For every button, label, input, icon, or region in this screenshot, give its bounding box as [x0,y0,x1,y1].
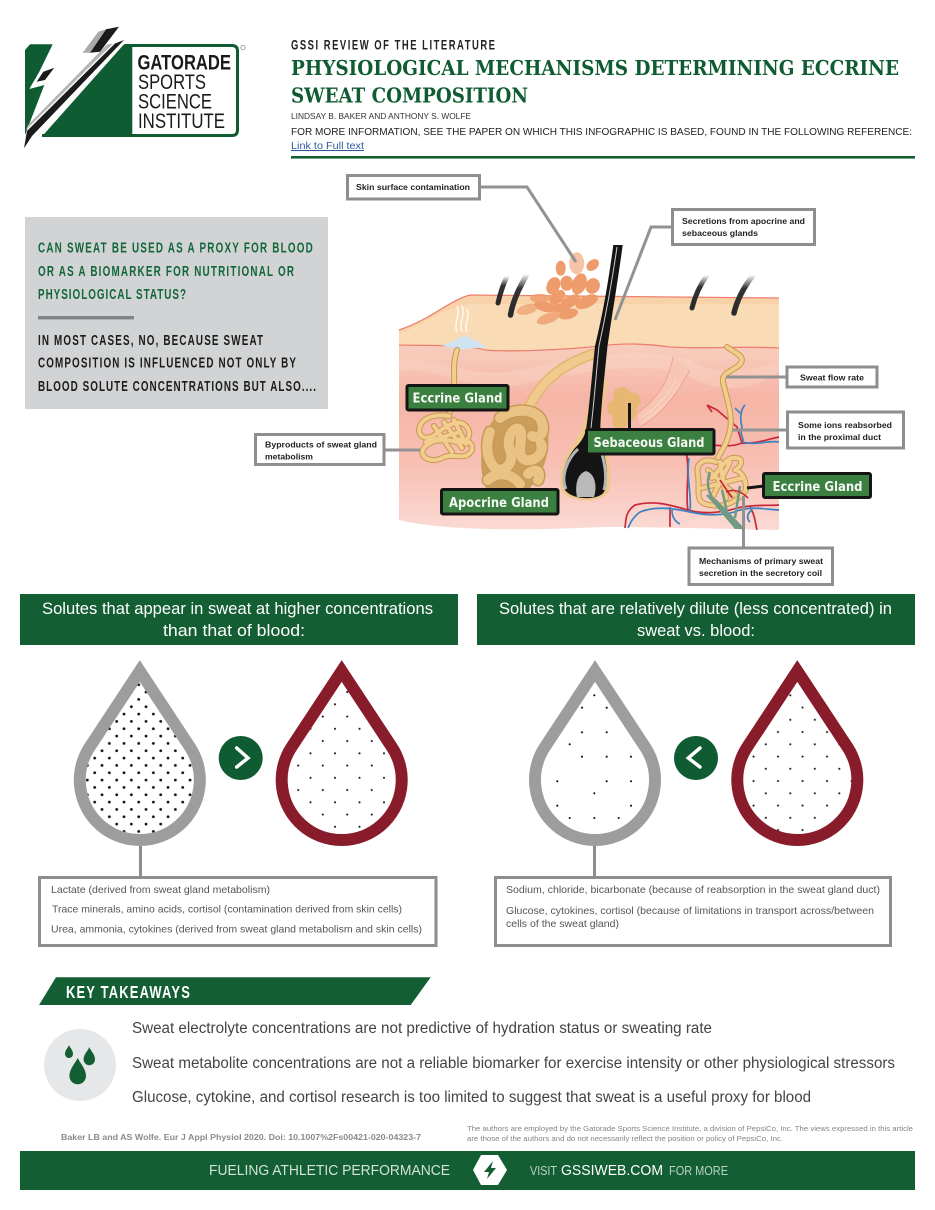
epidermis layer [399,295,779,351]
blood vessels [625,405,779,530]
text box: solutes dilute in sweat: Glucose, cytokines, cortisol (because of limitations in transport across/between [506,905,874,917]
question text: CAN SWEAT BE USED AS A PROXY FOR BLOOD [38,240,313,256]
text box: solutes higher in sweat: Lactate (derived from sweat gland metabolism) [51,884,270,896]
takeaway statements [132,1020,895,1106]
disclaimer: The authors are employed by the Gatorade Sports Science Institute, a division of PepsiCo, Inc. The views expressed in this article [467,1124,913,1133]
footer bar [20,1151,915,1190]
apocrine gland and duct [481,354,593,488]
panel header: solutes at higher concentrations [20,594,458,645]
right eccrine gland duct and coil [697,347,748,529]
arrector muscle [638,357,690,427]
answer text [38,332,316,395]
icon: hexagon bolt [473,1155,507,1185]
skin surface flakes [515,252,602,327]
callout: ions reabsorbed: Some ions reabsorbed [798,420,892,430]
label: eccrine gland right [747,474,870,498]
drop: blood, sparse solutes [272,660,412,850]
panel: key question [25,217,328,409]
logo: Gatorade Sports Science Institute: SPORTS [138,71,206,94]
text box: solutes dilute in sweat [496,846,890,946]
label: eccrine gland left [407,386,508,410]
callout: mechanisms of primary secretion: Mechanisms of primary sweat [699,556,823,566]
callout: ions reabsorbed: in the proximal duct [798,432,881,442]
callout: byproducts: Byproducts of sweat gland [265,440,377,450]
callout: sweat flow rate: Sweat flow rate [800,372,864,382]
takeaway statements: Sweat metabolite concentrations are not a reliable biomarker for exercise intensity or other physiological stressors [132,1055,895,1072]
takeaway statements: Glucose, cytokine, and cortisol research is too limited to suggest that sweat is a useful proxy for blood [132,1089,811,1106]
drop: sweat, dense solutes [70,660,210,850]
header: series label, title, authors, reference: SWEAT COMPOSITION [291,84,528,108]
disclaimer [467,1124,913,1143]
label: apocrine gland [442,490,558,514]
logo: Gatorade Sports Science Institute [24,27,245,148]
label: eccrine gland right: Eccrine Gland [772,479,862,495]
main hair and follicle [560,245,623,500]
icon: sweat drops [44,1029,116,1101]
text box: solutes dilute in sweat: Sodium, chloride, bicarbonate (because of reabsorption in the sweat gland duct) [506,884,880,896]
text box: solutes higher in sweat: Urea, ammonia, cytokines (derived from sweat gland metabolism and skin cells) [51,924,422,936]
logo: Gatorade Sports Science Institute: SCIENCE [138,91,212,114]
panel header: relatively dilute solutes: sweat vs. blood: [637,622,755,640]
callout: skin surface contamination [348,176,576,262]
header: series label, title, authors, reference: Link to Full text [291,140,364,152]
footer bar: FUELING ATHLETIC PERFORMANCE [209,1162,450,1179]
question text [38,240,313,303]
callout: secretions: sebaceous glands [682,228,758,238]
header: series label, title, authors, reference: FOR MORE INFORMATION, SEE THE PAPER ON WHICH THIS INFOGRAPHIC IS BASED, FOUND IN THE FOLLOWING REFERENCE: [291,126,912,138]
takeaway statements: Sweat electrolyte concentrations are not predictive of hydration status or sweating rate [132,1020,712,1037]
drop: blood, more solutes [728,660,868,850]
panel header: relatively dilute solutes: Solutes that are relatively dilute (less concentrated) in [499,600,892,618]
callout: secretions [615,210,814,320]
disclaimer: are those of the authors and do not necessarily reflect the position or policy of PepsiCo, Inc. [467,1134,783,1143]
panel header: solutes at higher concentrations: Solutes that appear in sweat at higher concentrations [42,600,433,618]
answer text: COMPOSITION IS INFLUENCED NOT ONLY BY [38,355,297,371]
small hairs [498,274,753,315]
text box: solutes higher in sweat: Trace minerals, amino acids, cortisol (contamination derived from skin cells) [52,904,402,916]
drop: sweat, dilute solutes [535,671,655,840]
callout: mechanisms of primary secretion: secretion in the secretory coil [699,568,822,578]
label: sebaceous gland: Sebaceous Gland [594,435,704,451]
callout: byproducts: metabolism [265,452,313,462]
header: series label, title, authors, reference [291,38,915,159]
label: sebaceous gland [586,403,714,454]
dermis layer [399,340,779,535]
text box: solutes dilute in sweat: cells of the sweat gland) [506,918,619,930]
left eccrine gland duct and coil [419,350,472,460]
answer text: BLOOD SOLUTE CONCENTRATIONS BUT ALSO.... [38,378,316,395]
skin cross-section illustration [399,245,779,535]
logo: Gatorade Sports Science Institute: GATORADE [138,52,231,74]
text box: solutes higher in sweat [40,846,436,946]
answer text: IN MOST CASES, NO, BECAUSE SWEAT [38,332,263,349]
footer bar: VISIT [530,1164,557,1178]
logo: Gatorade Sports Science Institute: INSTITUTE [138,110,225,133]
footer bar: FOR MORE [669,1164,728,1178]
callout: sweat flow rate [726,367,877,387]
icon: greater than [219,736,263,780]
panel header: relatively dilute solutes [477,594,915,645]
callout: secretions: Secretions from apocrine and [682,216,805,226]
key takeaways banner [39,977,431,1005]
callout: mechanisms of primary secretion [689,496,832,584]
header: series label, title, authors, reference: GSSI REVIEW OF THE LITERATURE [291,38,495,53]
callout: skin surface contamination: Skin surface contamination [356,182,470,192]
icon: less than [674,736,718,780]
label: apocrine gland: Apocrine Gland [449,495,549,511]
header: series label, title, authors, reference: LINDSAY B. BAKER AND ANTHONY S. WOLFE [291,111,471,121]
citation: Baker LB and AS Wolfe. Eur J Appl Physiol 2020. Doi: 10.1007%2Fs00421-020-04323-7 [61,1132,421,1142]
key takeaways banner: KEY TAKEAWAYS [66,983,190,1003]
label: eccrine gland left: Eccrine Gland [412,390,502,406]
callout: ions reabsorbed [732,412,904,448]
sweat pore cloud and vapour [441,305,486,350]
footer bar: GSSIWEB.COM [561,1162,663,1179]
callout: byproducts [256,434,420,464]
panel header: solutes at higher concentrations: than that of blood: [163,622,305,640]
question text: OR AS A BIOMARKER FOR NUTRITIONAL OR [38,263,294,280]
sebaceous gland [607,387,640,429]
question text: PHYSIOLOGICAL STATUS? [38,286,186,303]
